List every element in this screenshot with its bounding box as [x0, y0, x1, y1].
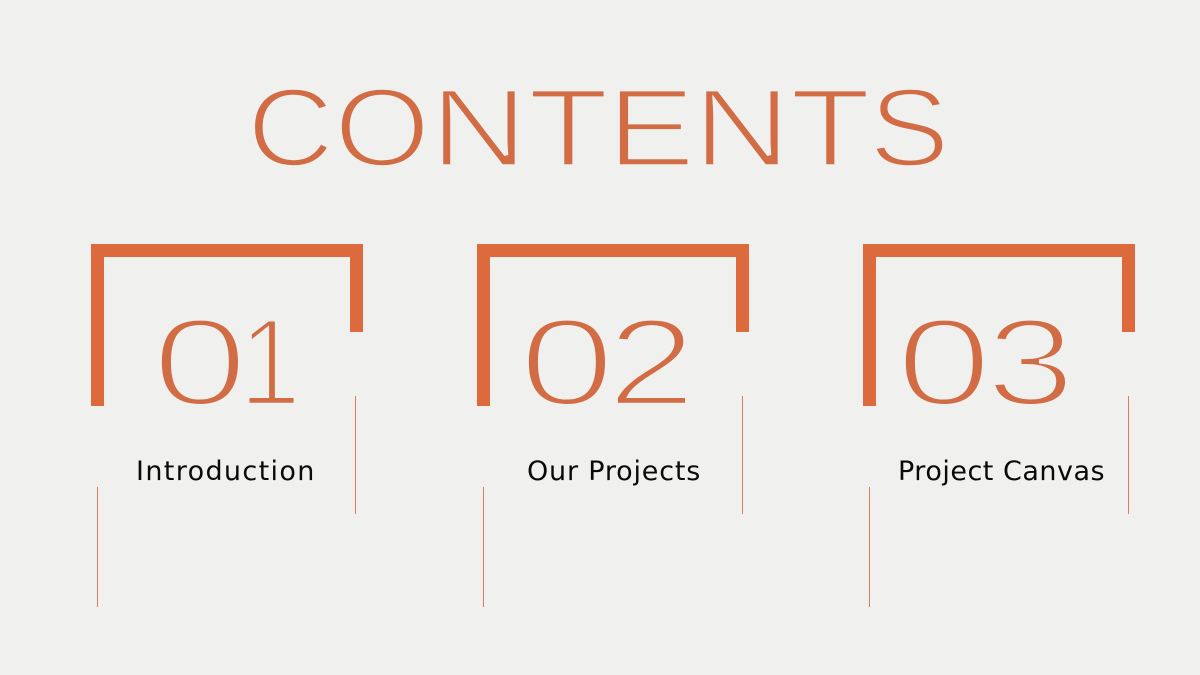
panel: 01 Introduction: [91, 244, 363, 607]
title: [247, 66, 950, 190]
title: N: [693, 66, 791, 190]
bracket: [91, 244, 363, 406]
right accent line: [1128, 396, 1129, 514]
title: T: [790, 66, 871, 190]
number 02: 0: [518, 294, 614, 432]
right accent line: [355, 396, 356, 514]
right accent line: [742, 396, 743, 514]
number 01: [152, 294, 301, 432]
label: Our Projects: Our Projects: [527, 456, 701, 487]
left accent line: [483, 487, 484, 607]
title: N: [430, 66, 528, 190]
title: E: [607, 66, 695, 190]
left accent line: [869, 487, 870, 607]
number 02: [518, 294, 696, 432]
title: O: [334, 66, 430, 190]
number 01: 0: [152, 294, 247, 432]
title: C: [247, 66, 334, 190]
label: Project Canvas: Project Canvas: [898, 456, 1105, 487]
title: S: [869, 66, 950, 190]
number 03: 3: [986, 294, 1075, 432]
panel: 02 Our Projects: [477, 244, 749, 607]
left accent line: [97, 487, 98, 607]
number 02: 2: [607, 294, 696, 432]
panel: 03 Project Canvas: [863, 244, 1135, 607]
label: Introduction: Introduction: [136, 456, 316, 487]
number 03: [896, 294, 1075, 432]
number 01: 1: [239, 294, 301, 432]
number 03: 0: [896, 294, 991, 432]
title: T: [528, 66, 609, 190]
bracket: [863, 244, 1135, 406]
bracket: [477, 244, 749, 406]
